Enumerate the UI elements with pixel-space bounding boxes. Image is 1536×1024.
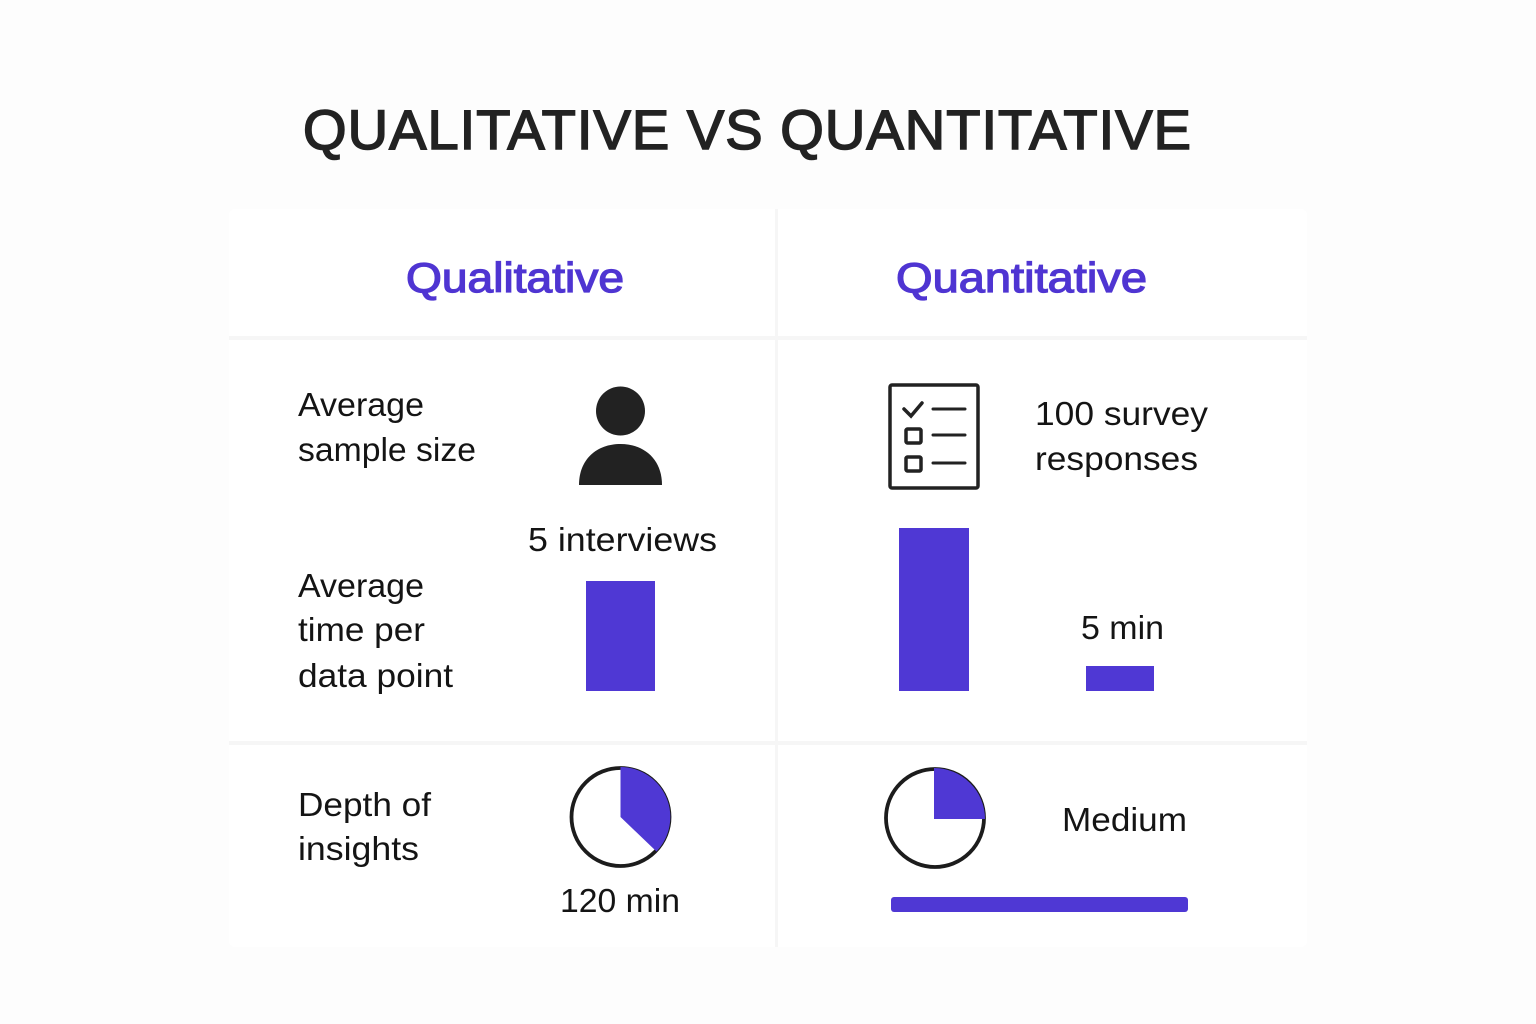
- value: 100 survey responses: [1035, 396, 1208, 478]
- bar: medium level: [891, 897, 1188, 912]
- value: medium: Medium: [1062, 802, 1187, 839]
- heading: qualitative: Qualitative: [406, 254, 624, 301]
- icon: person: [579, 386, 662, 485]
- value: 5 min: 5 min: [1081, 610, 1164, 647]
- label: average time per data point: Average: [298, 568, 424, 605]
- comparison table: [229, 209, 1307, 947]
- label: average sample size: Average: [298, 387, 424, 424]
- bar: quantitative tall: [899, 528, 969, 691]
- label: depth of insights: [298, 787, 432, 868]
- icon: survey checklist: [890, 385, 978, 488]
- bar: quantitative short: [1086, 666, 1154, 691]
- label: depth of insights: Depth of: [298, 787, 432, 824]
- label: average time per data point: data point: [298, 658, 454, 695]
- value: 5 interviews: 5 interviews: [528, 522, 717, 559]
- bar: qualitative time: [586, 581, 655, 691]
- value: 120 min: 120 min: [560, 883, 680, 920]
- label: average time per data point: [298, 568, 454, 695]
- heading: quantitative: Quantitative: [896, 254, 1147, 301]
- title: QUALITATIVE VS QUANTITATIVE: [303, 98, 1191, 161]
- value: 100 survey responses: 100 survey: [1035, 396, 1208, 433]
- label: depth of insights: insights: [298, 831, 419, 868]
- pie chart: quantitative: [886, 768, 985, 867]
- label: average sample size: [298, 387, 476, 469]
- label: average time per data point: time per: [298, 612, 425, 649]
- pie chart: qualitative: [572, 767, 670, 866]
- value: 100 survey responses: responses: [1035, 441, 1198, 478]
- label: average sample size: sample size: [298, 432, 476, 469]
